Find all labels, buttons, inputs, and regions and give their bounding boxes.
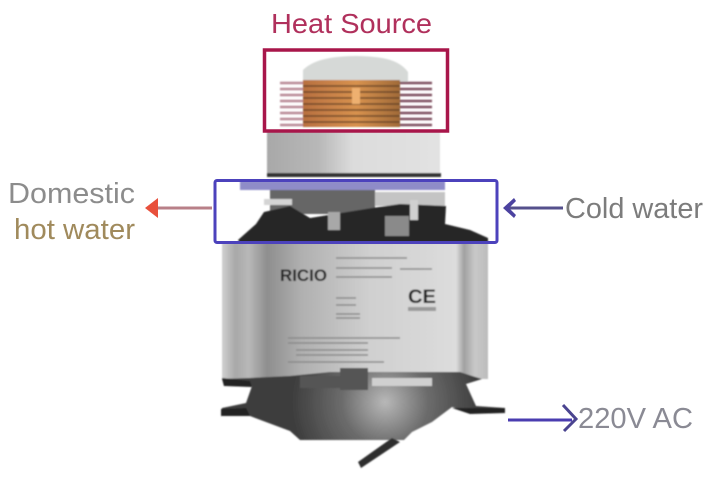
label: Cold water: Cold water <box>565 193 703 225</box>
arrow: hot water outlet <box>145 198 212 218</box>
mark: CE: CE <box>408 287 436 308</box>
brand: Ricio: RICIO <box>280 266 327 285</box>
heading: Heat Source: Heat Source <box>271 8 432 39</box>
copper coil <box>280 80 432 127</box>
neck <box>267 131 440 177</box>
base and mounting feet <box>221 368 505 468</box>
arrow: power input <box>508 405 576 431</box>
label: 220V AC: 220V AC <box>578 403 693 435</box>
rating label <box>280 258 436 362</box>
box: heat source highlight <box>264 50 448 131</box>
body housing <box>222 243 488 379</box>
box: water connections highlight <box>215 180 497 242</box>
arrow: cold water inlet <box>503 198 563 218</box>
label: Domestic hot water: hot water <box>14 214 135 246</box>
label: Domestic hot water <box>8 178 135 246</box>
cap dome <box>303 56 408 82</box>
label: Domestic hot water: Domestic <box>8 178 135 210</box>
device: water heater unit <box>221 56 505 468</box>
pipe manifold <box>238 181 488 243</box>
